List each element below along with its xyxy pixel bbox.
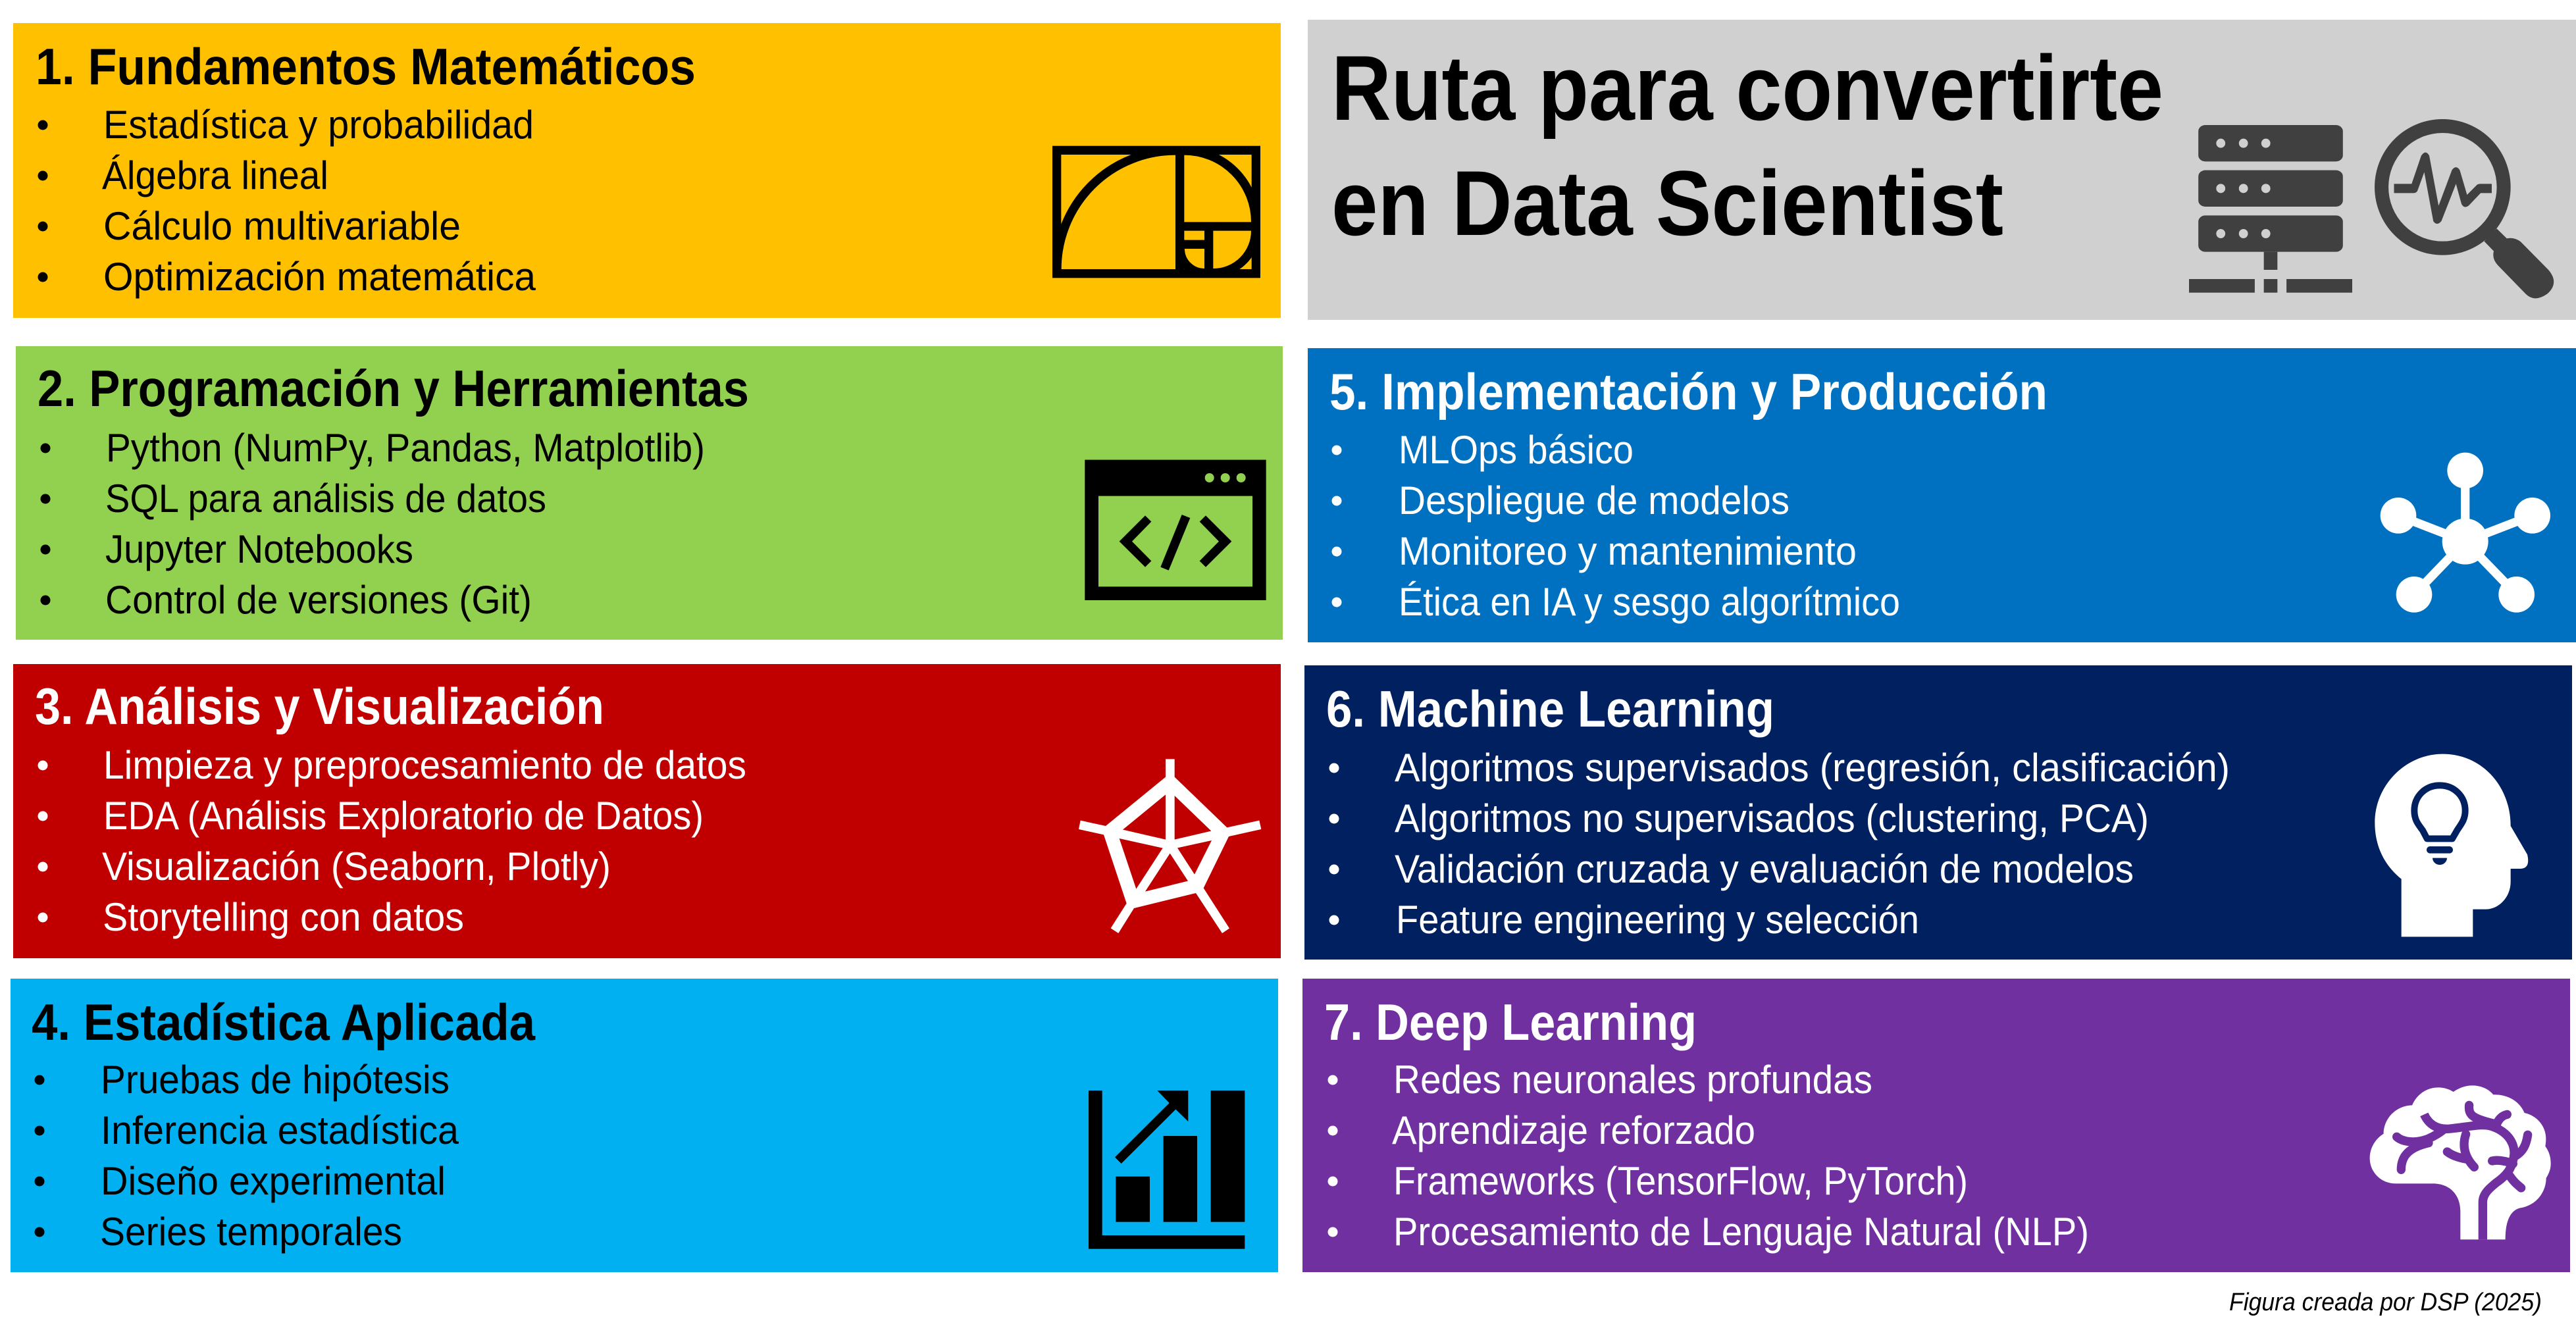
bullet list: section 4: Series temporales [100,1210,402,1254]
panel: 4. Estadística Aplicada [11,979,1278,1272]
icon: server [2189,125,2352,293]
icon: rising bar chart [1089,1091,1245,1249]
bullet list: section 4: Inferencia estadística [101,1108,459,1152]
title text: en Data Scientist [1331,151,2003,255]
bullet list: section 4 [34,1058,459,1254]
bullet list: section 3 [38,743,746,939]
icon: network hub [2381,453,2550,613]
icon: golden ratio spiral [1057,150,1256,274]
bullet list: section 2: Jupyter Notebooks [105,527,413,571]
bullet list: section 3: Limpieza y preprocesamiento de datos [103,743,746,787]
bullet list: section 1 [38,103,536,299]
bullet list: section 5: MLOps básico [1399,428,1634,472]
panel: 5. Implementación y Producción [1308,348,2576,642]
bullet list: section 7: Procesamiento de Lenguaje Natural (NLP) [1393,1210,2089,1254]
bullet list: section 2: Control de versiones (Git) [105,578,532,622]
bullet list: section 1: Estadística y probabilidad [103,103,534,147]
bullet list: section 1: Álgebra lineal [102,153,328,197]
panel: 6. Machine Learning [1304,665,2572,960]
bullet list: section 7: Frameworks (TensorFlow, PyTorch) [1393,1159,1968,1203]
heading: section 2: 2. Programación y Herramientas [38,359,749,417]
icon: radar chart [1079,759,1261,933]
bullet list: section 1: Optimización matemática [103,255,536,299]
panel: 7. Deep Learning [1302,979,2570,1272]
bullet list: section 6: Algoritmos supervisados (regresión, clasificación) [1395,746,2230,790]
bullet list: section 4: Pruebas de hipótesis [101,1058,450,1102]
bullet list: section 3: EDA (Análisis Exploratorio de Datos) [103,794,704,838]
panel: 3. Análisis y Visualización [13,664,1281,958]
bullet list: section 5: Ética en IA y sesgo algorítmico [1399,580,1900,624]
title text: Ruta para convertirte [1331,36,2163,140]
bullet list: section 2 [41,426,705,622]
heading: section 5: 5. Implementación y Producción [1329,363,2048,421]
title text [1331,36,2163,255]
heading: section 3: 3. Análisis y Visualización [35,677,604,735]
icon: head with light bulb [2375,754,2528,937]
bullet list: section 6: Algoritmos no supervisados (clustering, PCA) [1395,796,2149,840]
icon: magnifying glass with pulse [2375,119,2554,298]
icon: code window [1085,460,1266,600]
bullet list: section 5: Despliegue de modelos [1399,478,1790,523]
bullet list: section 6: Feature engineering y selección [1396,898,1919,942]
bullet list: section 1: Cálculo multivariable [103,204,461,248]
heading: section 1: 1. Fundamentos Matemáticos [36,38,696,95]
panel: title [1308,20,2576,320]
bullet list: section 6 [1329,746,2230,942]
panel: 2. Programación y Herramientas [16,346,1283,640]
bullet list: section 7: Aprendizaje reforzado [1392,1108,1755,1152]
heading: section 7: 7. Deep Learning [1324,993,1697,1051]
bullet list: section 3: Storytelling con datos [103,895,464,939]
bullet list: section 5 [1332,428,1900,624]
bullet list: section 4: Diseño experimental [101,1159,446,1203]
bullet list: section 3: Visualización (Seaborn, Plotly) [102,844,611,888]
heading: section 6: 6. Machine Learning [1326,680,1774,738]
bullet list: section 7: Redes neuronales profundas [1393,1058,1872,1102]
panel: 1. Fundamentos Matemáticos [13,23,1281,318]
bullet list: section 6: Validación cruzada y evaluación de modelos [1395,847,2134,891]
icon: brain [2370,1085,2551,1239]
heading: section 4: 4. Estadística Aplicada [32,993,536,1051]
bullet list: section 2: Python (NumPy, Pandas, Matplotlib) [106,426,705,470]
bullet list: section 7 [1328,1058,2089,1254]
footer credit: Figura creada por DSP (2025) [2229,1289,2542,1316]
bullet list: section 5: Monitoreo y mantenimiento [1399,529,1857,573]
bullet list: section 2: SQL para análisis de datos [105,476,546,521]
